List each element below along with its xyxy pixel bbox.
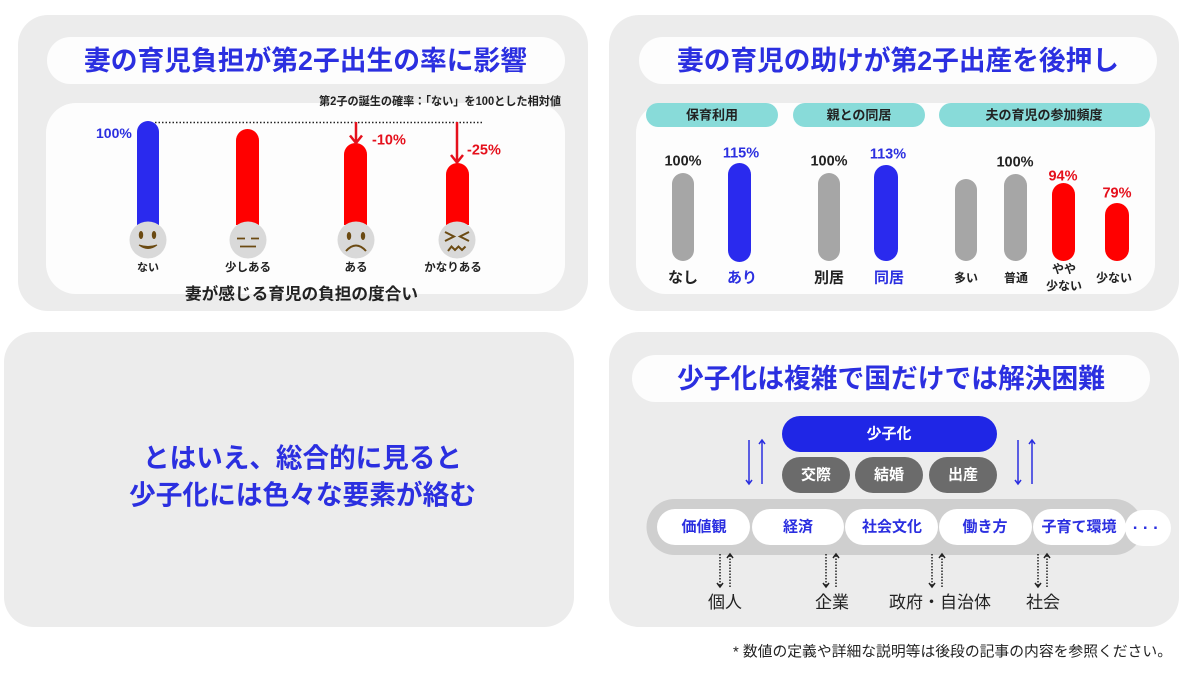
bar: often: 多い [954,270,978,285]
factor: values: 価値観 [681,518,727,536]
bar: no childcare use: 100% [664,154,702,170]
panel: wife's childcare burden [18,15,588,311]
dotted arrows: companies [823,554,839,587]
icon: distressed face [438,222,476,258]
bar: no childcare use: なし [668,270,698,286]
bar: somewhat rarely: やや [1052,262,1076,276]
label: individual: 個人 [708,593,742,612]
heading: complexity: 少子化は複雑で国だけでは解決困難 [677,364,1105,394]
bar: normal [996,154,1034,285]
heading: burden: 妻の育児負担が第2子出生の率に影響 [84,45,527,76]
tag: childcare use: 保育利用 [686,108,738,122]
pill: marriage: 結婚 [874,466,904,484]
label: society: 社会 [1026,593,1060,612]
factor: work style [939,509,1032,545]
panel: summary message [4,332,574,627]
bar: often [954,179,978,285]
arrows: left blue pair [746,440,765,484]
factor: economy: 経済 [783,518,813,536]
dotted arrows: individual [717,554,733,587]
pill: low birthrate [782,416,997,452]
factor: social culture: 社会文化 [862,518,922,536]
message line 1: とはいえ、総合的に見ると [143,444,462,474]
label: some: ある [344,261,368,274]
baseline dotted reference [155,122,483,124]
label: companies: 企業 [815,593,849,612]
chart card: burden bars [46,94,565,294]
bar: childcare use [723,146,759,286]
icon: smiling face [130,222,166,258]
dotted arrows: government [929,554,945,587]
bar: slight [236,129,259,225]
bar: none 100%: 100% [96,125,132,141]
factor: others [1125,510,1171,546]
heading: burden [47,37,565,84]
heading: support: 妻の育児の助けが第2子出産を後押し [677,45,1119,76]
bar: normal: 100% [996,154,1034,170]
chart card: support bars [636,103,1155,294]
arrows: right blue pair [1015,440,1035,484]
pill: childbirth [929,457,997,493]
label: none: ない [137,261,159,274]
pill: childbirth: 出産 [948,466,978,484]
pill: low birthrate: 少子化 [866,426,912,442]
footnote: * 数値の定義や詳細な説明等は後段の記事の内容を参照ください。 [733,642,1172,660]
heading: complexity [632,355,1150,402]
factor: social culture [845,509,938,545]
bar: rarely: 少ない [1096,270,1132,285]
bar: normal: 普通 [1004,270,1028,285]
bar: living apart [810,154,848,286]
factor: work style: 働き方 [962,518,1008,536]
label: slight: 少しある [225,260,271,274]
panel: complex low birthrate [609,332,1179,627]
bar: living together [870,146,906,286]
bar: living apart: 100% [810,154,848,170]
label: a lot: かなりある [424,261,482,274]
pill: dating [782,457,850,493]
bar: none 100% [96,121,159,225]
factor: childcare environment: 子育て環境 [1041,518,1117,536]
bar: no childcare use [664,154,702,286]
tag: living with parents: 親との同居 [827,108,891,122]
dotted arrows: society [1035,554,1050,587]
factor: economy [752,509,844,545]
tag: childcare use [646,103,778,127]
bar: childcare use: 115% [723,146,759,162]
bar: somewhat rarely [1046,168,1082,293]
bar: living together: 同居 [874,270,904,286]
pill: dating: 交際 [801,466,831,484]
pill: marriage [855,457,923,493]
icon: sad face [338,222,374,258]
bar: living together: 113% [870,146,906,162]
bar: rarely: 79% [1102,186,1132,202]
bar: childcare use: あり [727,270,757,286]
chart note: 第2子の誕生の確率：「ない」を100とした相対値 [319,94,561,108]
tag: husband participation [939,103,1150,127]
heading: support [639,37,1157,84]
factor: childcare environment [1033,509,1126,545]
icon: neutral face [230,222,266,258]
panel: childcare support [609,15,1179,311]
bar: rarely [1096,186,1132,285]
axis title: 妻が感じる育児の負担の度合い [185,284,418,304]
bar: some -10% [344,122,406,225]
bar: a lot -25% [446,122,501,225]
bar: somewhat rarely: 94% [1048,168,1078,184]
tag: husband participation: 夫の育児の参加頻度 [985,108,1103,122]
label: government: 政府・自治体 [889,593,991,612]
tag: living with parents [793,103,925,127]
factor: values [657,509,750,545]
factor: others: ··· [1133,518,1163,538]
bar: a lot -25%: -25% [467,142,501,158]
bar: living apart: 別居 [814,270,844,286]
message line 2: 少子化には色々な要素が絡む [129,480,476,510]
factors band [646,499,1171,555]
bar: some -10%: -10% [372,132,406,148]
bar: somewhat rarely: 少ない [1046,278,1082,293]
